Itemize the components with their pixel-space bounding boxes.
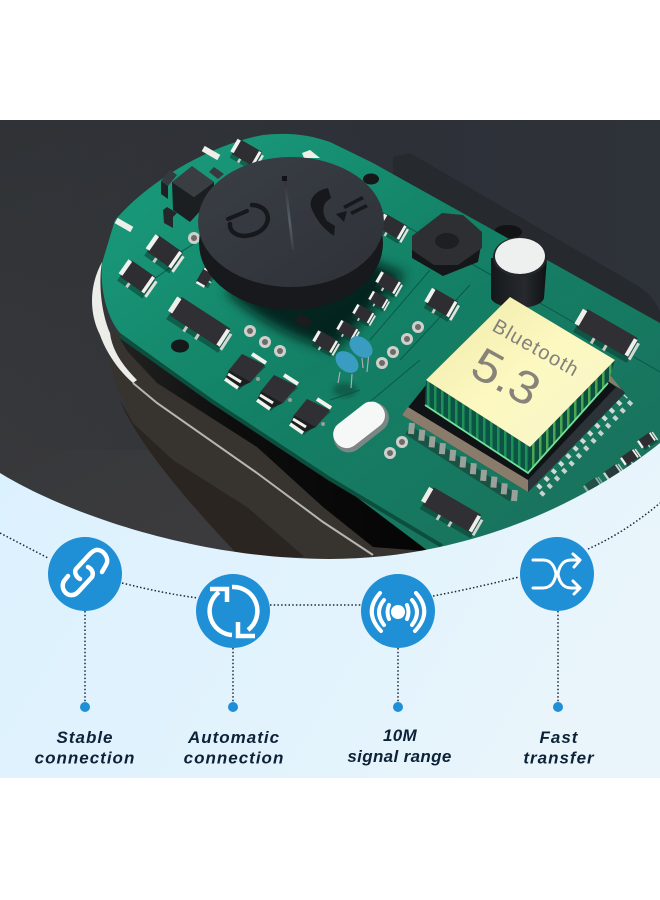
- circuit board: [102, 134, 660, 560]
- chip fins left: [425, 380, 530, 473]
- dark textured background: [0, 120, 660, 778]
- mounting holes: [171, 174, 379, 352]
- chip base: [402, 378, 625, 492]
- connector dot: [553, 702, 563, 712]
- large chip right: [570, 307, 642, 365]
- feature: fast transfer: [520, 537, 595, 768]
- version number: 5.3: [463, 338, 549, 417]
- small chip by switch: [421, 287, 461, 323]
- tactile switch: [412, 213, 482, 276]
- label: Stable: [56, 728, 114, 747]
- brown frame corner: [603, 375, 622, 390]
- large chip left: [163, 295, 235, 355]
- connector dot: [228, 702, 238, 712]
- far right small chips: [583, 430, 659, 496]
- connector dot: [80, 702, 90, 712]
- feature: 10M signal range: [347, 574, 452, 766]
- board lower edge: [120, 336, 442, 546]
- left chip pins: [408, 423, 515, 501]
- product photo panel: [0, 120, 660, 778]
- brown case shadow: [120, 400, 320, 557]
- electrolytic capacitor: [491, 237, 547, 308]
- phone and playback icon: [311, 188, 368, 236]
- label: transfer: [523, 748, 595, 768]
- small chips left: [115, 138, 410, 300]
- case side wall: [105, 333, 445, 559]
- label: signal range: [347, 747, 452, 766]
- icon: shuffle arrows: [520, 537, 594, 611]
- icon: signal waves: [361, 574, 435, 648]
- power icon: [228, 205, 268, 236]
- label: 10M: [383, 726, 418, 745]
- solder pads: [115, 146, 320, 232]
- parts under button: [294, 271, 404, 358]
- housing hole: [494, 225, 522, 239]
- shadow under round button: [225, 260, 405, 350]
- label: connection: [184, 748, 284, 768]
- button divider: [282, 176, 293, 250]
- silver case line: [133, 383, 373, 555]
- chip top: [426, 297, 615, 447]
- right background tone: [0, 120, 660, 450]
- label: Automatic: [187, 728, 280, 747]
- board traces: [150, 210, 660, 405]
- connector dot: [393, 702, 403, 712]
- feature: stable connection: [35, 537, 135, 768]
- silver case rim: [92, 262, 137, 383]
- black rear housing: [393, 153, 660, 350]
- label: connection: [35, 748, 135, 768]
- round multifunction button: [198, 157, 384, 310]
- dotted connecting curve: [0, 503, 660, 702]
- bottom chip: [417, 485, 485, 540]
- feature: automatic connection: [184, 574, 284, 768]
- icon: sync arrows: [196, 574, 270, 648]
- grey base edge: [528, 385, 625, 492]
- label: Fast: [540, 728, 579, 747]
- brown base edge: [402, 407, 528, 492]
- vias: [188, 232, 424, 459]
- square block components: [161, 166, 224, 228]
- white band bottom: [0, 778, 660, 900]
- bluetooth label: Bluetooth: [489, 315, 583, 382]
- blue ceramic capacitors: [331, 332, 377, 397]
- light blue curved panel: [0, 443, 660, 778]
- white band top: [0, 0, 660, 120]
- bluetooth processor chip: [402, 297, 632, 501]
- right chip pins: [538, 396, 632, 495]
- chip fin glow: [425, 383, 608, 473]
- crystal oscillator: [326, 395, 395, 458]
- lower chips: [224, 354, 331, 435]
- chip fins right: [528, 360, 615, 473]
- icon: chain link: [48, 537, 122, 611]
- dark gap under board: [118, 336, 442, 551]
